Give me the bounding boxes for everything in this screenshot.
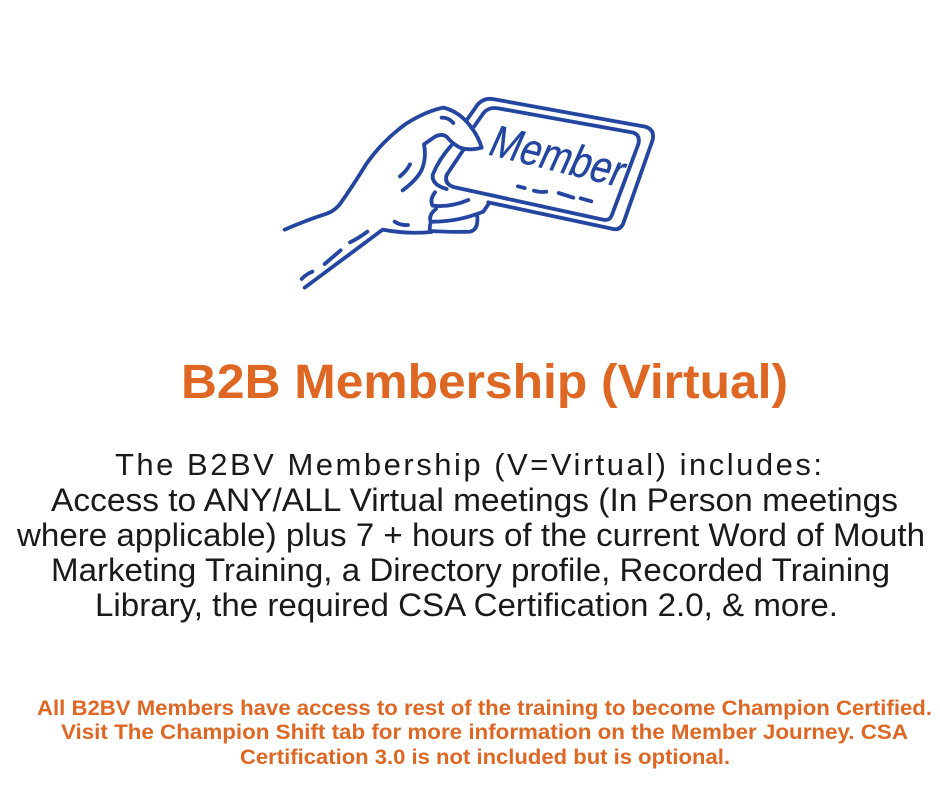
title: B2B Membership (Virtual): [181, 356, 788, 409]
sleeve dashes: [350, 232, 367, 242]
description text block: Marketing Training, a Directory profile, Recorded Training: [51, 552, 890, 588]
card dashes: [518, 186, 525, 188]
index finger: [433, 145, 452, 189]
footer note: Certification 3.0 is not included but is optional.: [240, 746, 730, 769]
description text block: Library, the required CSA Certification 2.0, & more.: [95, 587, 838, 623]
card inner edge: [446, 108, 639, 220]
card outer edge: [467, 99, 653, 229]
thumb knuckle: [442, 118, 453, 123]
thumb crease: [400, 164, 410, 176]
description text block: The B2BV Membership (V=Virtual) includes:: [115, 447, 822, 482]
footer note: All B2BV Members have access to rest of the training to become Champion Certified.: [37, 697, 932, 720]
wrist and arm: [305, 230, 431, 288]
hand outline: [285, 108, 482, 230]
description text block: [16, 447, 925, 623]
description text block: Access to ANY/ALL Virtual meetings (In Person meetings: [51, 482, 898, 518]
card handwritten label: Member: [482, 116, 635, 196]
fingers: [431, 192, 468, 206]
footer note: [37, 697, 932, 769]
footer note: Visit The Champion Shift tab for more information on the Member Journey. CSA: [61, 721, 908, 744]
icon: hand holding member card: [285, 99, 653, 288]
description text block: where applicable) plus 7 + hours of the current Word of Mouth: [16, 517, 925, 553]
